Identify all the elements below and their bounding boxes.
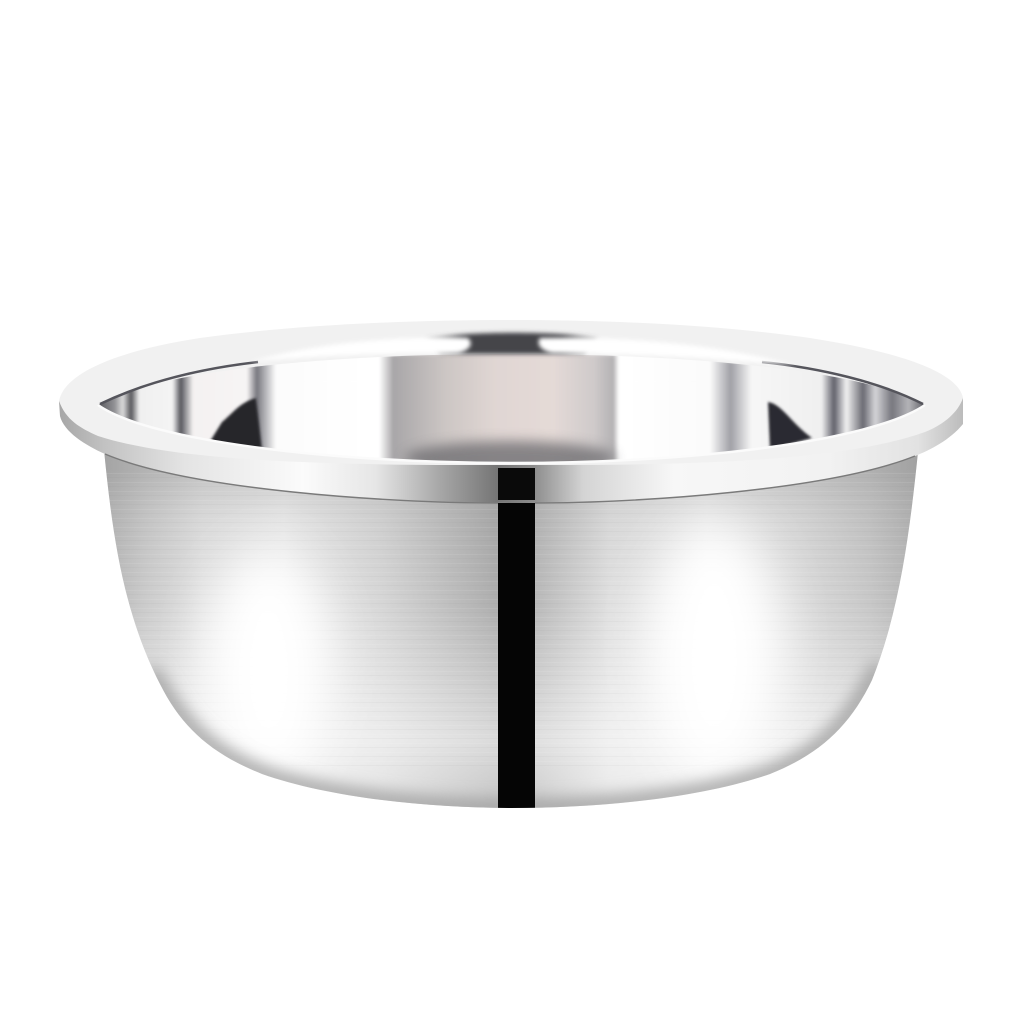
floor shadow — [405, 441, 615, 475]
bowl interior — [98, 354, 925, 462]
white highlight left — [250, 338, 471, 362]
black reflection on rim — [498, 468, 535, 500]
upper inner rim reflection — [250, 333, 796, 366]
dark reflection right — [768, 402, 812, 450]
rim front band — [59, 398, 963, 503]
upper inner edge shadow — [100, 362, 923, 404]
rim top surface — [59, 320, 963, 503]
bright reflection left — [206, 550, 330, 780]
dark reflection left — [209, 398, 262, 450]
rim lower edge line — [105, 454, 915, 503]
bright reflection right — [649, 525, 781, 775]
dark rim reflection — [425, 333, 598, 354]
bottom edge shading — [150, 665, 880, 808]
inner edge highlight — [98, 405, 925, 463]
bowl body — [90, 440, 930, 820]
black vertical reflection — [498, 500, 535, 810]
white highlight right — [538, 338, 796, 366]
illustration: stainless steel bowl — [59, 320, 963, 808]
